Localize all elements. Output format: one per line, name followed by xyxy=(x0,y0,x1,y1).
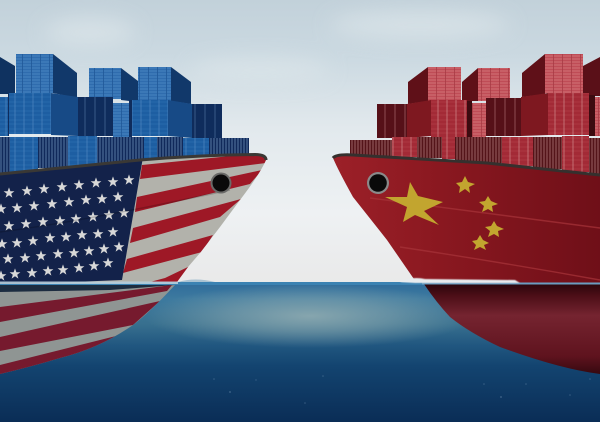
containers: American ship xyxy=(0,54,249,174)
Chinese hull above water xyxy=(333,155,600,284)
small yellow stars xyxy=(456,176,504,250)
top row of red containers xyxy=(408,54,600,104)
Chinese deck rim xyxy=(333,155,600,175)
Chinese porthole xyxy=(367,172,389,194)
middle row of blue containers xyxy=(0,93,222,138)
containers: Chinese ship xyxy=(350,54,600,175)
star field xyxy=(0,157,143,285)
submerged red stripes xyxy=(0,285,172,376)
red hull stripes xyxy=(123,152,270,282)
large yellow star xyxy=(385,182,443,225)
American hull below water xyxy=(0,285,175,374)
sky background xyxy=(0,0,600,285)
American porthole xyxy=(210,172,232,194)
lower row of red containers xyxy=(350,136,600,175)
American deck rim xyxy=(0,154,266,174)
hull ridge lines xyxy=(370,198,600,280)
Chinese hull below water xyxy=(424,284,600,374)
top row of blue containers xyxy=(0,54,191,104)
American hull above water, painted as flag xyxy=(0,153,268,284)
sea xyxy=(0,282,600,422)
water line and bow waves xyxy=(0,278,600,284)
middle row of red containers xyxy=(377,93,600,138)
lower row of blue containers xyxy=(0,136,249,174)
